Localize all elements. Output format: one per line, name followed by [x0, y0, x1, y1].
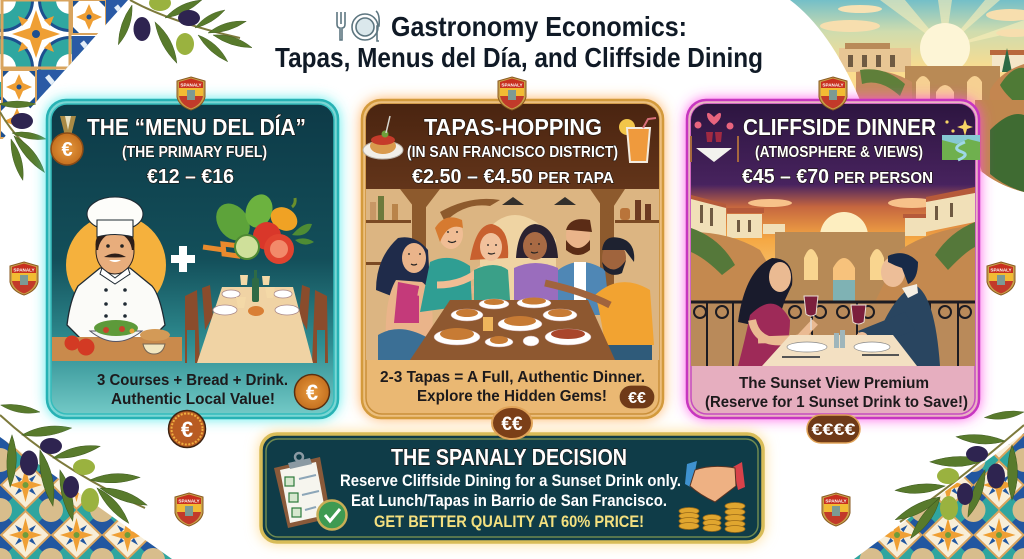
illustration: dining table [185, 270, 328, 363]
icon: euro coin under menu panel: € [181, 417, 193, 442]
person 3 [470, 224, 510, 300]
icon: euro coin: € [306, 380, 318, 405]
icon: medal [51, 116, 83, 165]
decision heading: THE SPANALY DECISION [391, 444, 627, 470]
tapas footer text [380, 369, 645, 405]
cliffside price: PER PERSON [834, 170, 933, 187]
menu subheading: (THE PRIMARY FUEL) [122, 144, 267, 161]
icon: medal: € [61, 139, 73, 161]
decision highlight: GET BETTER QUALITY AT 60% PRICE! [374, 512, 644, 531]
person 5 [558, 219, 610, 315]
plus sign [171, 246, 195, 272]
illustration: sunset couple over bridge [691, 185, 975, 366]
icon: orange drink [619, 118, 656, 162]
panel: tapas-hopping [362, 100, 663, 418]
icon: euro coin under menu panel [168, 410, 206, 448]
title: Gastronomy Economics: [391, 11, 687, 42]
decision line one: Reserve Cliffside Dining for a Sunset Drink only. [340, 472, 681, 490]
menu footer text [97, 372, 288, 408]
menu footer text: 3 Courses + Bread + Drink. [97, 372, 288, 389]
person 4 [514, 224, 560, 300]
cliffside footer text: (Reserve for 1 Sunset Drink to Save!) [705, 394, 968, 411]
icon: coin stacks [679, 502, 745, 532]
illustration: vegetables [203, 191, 314, 264]
icon: handshake [685, 461, 745, 502]
tapas price: PER TAPA [538, 170, 614, 187]
bottom-left olive branch [0, 402, 149, 526]
illustration: chef [52, 197, 182, 361]
man [851, 253, 940, 366]
cliffside footer text: The Sunset View Premium [739, 375, 929, 392]
cliffside header band [691, 104, 975, 192]
illustration: tapas bar scene [366, 189, 659, 360]
woman [738, 258, 826, 366]
left olive branch [0, 101, 48, 181]
panel: menu del dia [47, 100, 338, 418]
bottom-right tiles [854, 433, 1024, 559]
top-right Ronda landscape [780, 0, 1024, 200]
bottom-right olive branch [894, 409, 1024, 541]
shield: right [987, 262, 1015, 295]
menu price: €12 – €16 [147, 166, 234, 188]
tapas price: €2.50 – €4.50 [412, 166, 533, 188]
icon: two-euro badge: €€ [628, 390, 646, 407]
title [275, 11, 763, 73]
cliffside footer text [705, 375, 968, 411]
bottom-left tiles [0, 437, 172, 559]
cliffside price [742, 166, 933, 188]
icon: four-euro badge under cliffside panel [807, 415, 860, 443]
icon: stars and landscape [942, 119, 980, 160]
tapas heading: TAPAS-HOPPING [424, 114, 602, 140]
panel: cliffside dinner [687, 100, 980, 418]
icon: tapa plate [363, 116, 403, 159]
shield: top centre [498, 77, 526, 110]
title: Tapas, Menus del Día, and Cliffside Dining [275, 42, 763, 73]
shield: bottom right [822, 493, 850, 526]
icon: romantic table [691, 113, 738, 162]
table [762, 330, 917, 366]
person 1 [376, 237, 484, 360]
table with tapas plates [410, 298, 615, 360]
decision line two: Eat Lunch/Tapas in Barrio de San Francisco. [351, 492, 667, 510]
icon: plate and cutlery [337, 11, 379, 41]
menu footer text: Authentic Local Value! [111, 391, 275, 408]
top-left olive branch [115, 0, 253, 65]
shield: bottom left [175, 493, 203, 526]
panel: the spanaly decision [260, 433, 764, 543]
tapas header band [366, 104, 659, 189]
top-left tile corner [0, 0, 140, 138]
shield: left [10, 262, 38, 295]
tapas price [412, 166, 614, 188]
icon: euro coin [294, 374, 330, 410]
person 2 [420, 217, 482, 312]
icon: two-euro coin under tapas panel: €€ [501, 414, 523, 435]
icon: two-euro coin under tapas panel [492, 407, 532, 439]
menu heading: THE “MENU DEL DÍA” [87, 113, 306, 140]
cliffside price: €45 – €70 [742, 166, 829, 188]
cliffside heading: CLIFFSIDE DINNER [743, 114, 936, 140]
cliffside subheading: (ATMOSPHERE & VIEWS) [755, 144, 923, 161]
icon: two-euro badge [619, 385, 655, 409]
person 6 [545, 237, 654, 360]
icon: four-euro badge under cliffside panel: €€€€ [812, 420, 856, 439]
shield: top right [819, 77, 847, 110]
tapas footer text: 2-3 Tapas = A Full, Authentic Dinner. [380, 369, 645, 386]
tapas footer text: Explore the Hidden Gems! [417, 388, 607, 405]
shield: top left [177, 77, 205, 110]
tapas subheading: (IN SAN FRANCISCO DISTRICT) [407, 144, 618, 161]
icon: clipboard checklist [274, 453, 346, 530]
